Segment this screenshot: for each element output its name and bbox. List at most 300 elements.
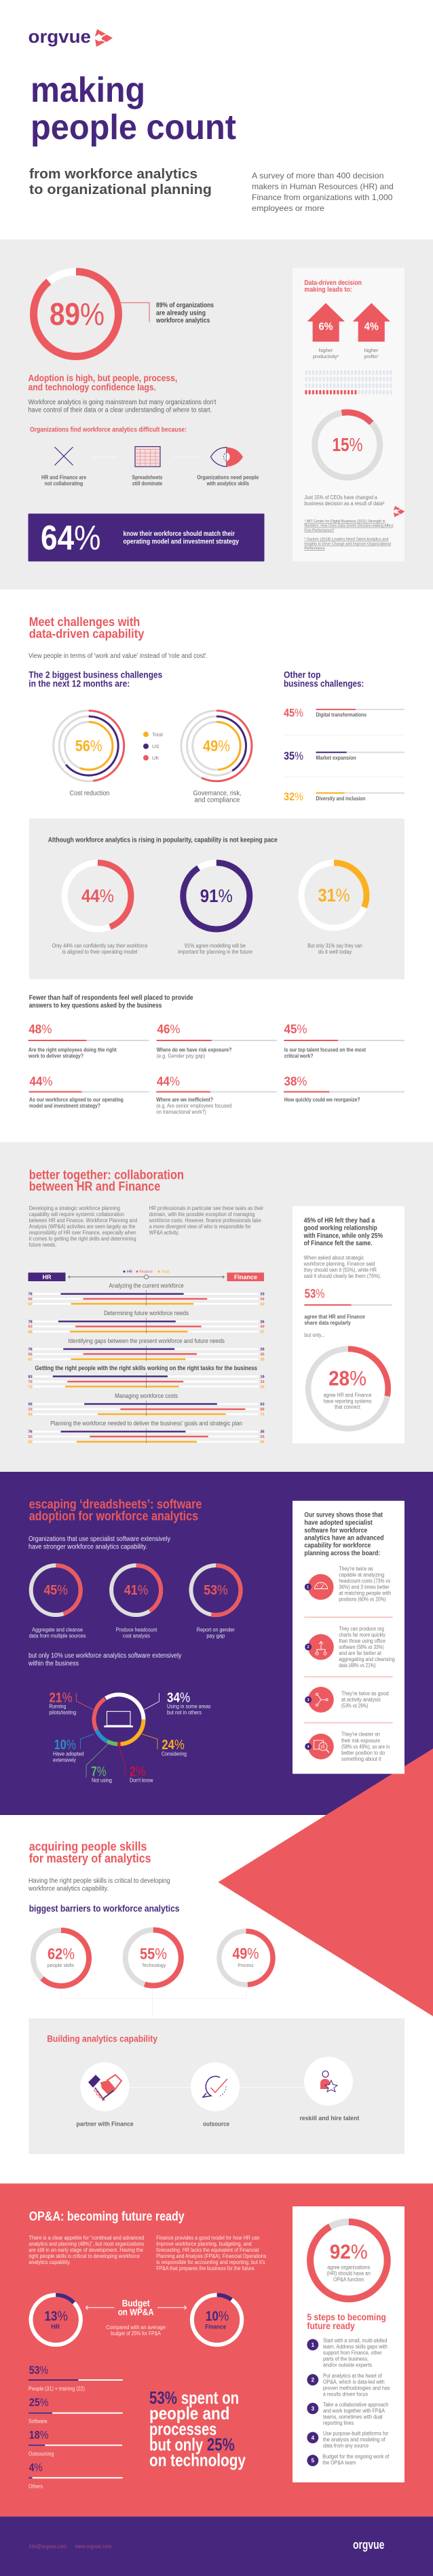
chart row: determining future workforce needs: 26 [261, 1320, 265, 1324]
spending bar: outsourcing: Outsourcing [29, 2451, 54, 2457]
item 4 [305, 1731, 390, 1762]
item 1: They're twice as [339, 1565, 373, 1572]
card heading: planning across the board: [304, 1549, 380, 1557]
body text: right column: domain, with the possible exception of managing [149, 1211, 255, 1217]
stat: 45%: 45% [284, 1021, 307, 1036]
chart row: getting the right people: 72 [29, 1385, 33, 1389]
card heading: 5 steps: future ready [307, 2320, 355, 2331]
icon: gauge [315, 1582, 327, 1588]
heading: key questions: answers to key questions asked by the business [29, 1002, 162, 1009]
stat: 46%: Where do we have risk exposure? [157, 1047, 231, 1053]
donut chart: 31% [301, 863, 366, 928]
item 4: their risk exposure [341, 1738, 380, 1744]
donut chart: 92%: (HR) should have an [327, 2271, 371, 2277]
chart row: planning the workforce: 76 [29, 1430, 33, 1435]
step 2: a results driven focus [323, 2391, 368, 2397]
stat: 48%: work to deliver strategy? [28, 1053, 83, 1059]
triple ring chart: cost reduction [54, 711, 124, 781]
callout: 53% spent on people [149, 2387, 246, 2470]
callout: 64%: 64% [41, 518, 100, 557]
stat: 44% inefficiency: on transactional work?) [156, 1109, 206, 1115]
callout: 53% spent on people: people and [149, 2403, 229, 2423]
step 1: and/or outside experts [323, 2362, 372, 2368]
step 2: 2 [312, 2377, 315, 2383]
chart row: identifying gaps: 76 [29, 1348, 33, 1352]
chart row: planning the workforce: 35 [261, 1430, 265, 1435]
callout: 64%: know their workforce should match their [124, 530, 235, 538]
panel: data-driven decisions [293, 268, 404, 562]
stat: 53%: but only... [304, 1332, 325, 1338]
card heading: Data-driven decision [304, 279, 362, 287]
chart row: managing workforce costs: 23 [29, 1408, 33, 1412]
body text: left column [29, 2235, 144, 2265]
chart row: planning the workforce: 62 [29, 1441, 33, 1445]
survey description: Finance from organizations with 1,000 [252, 193, 393, 202]
stat: 38%: How quickly could we reorganize? [284, 1097, 360, 1103]
chart row: planning the workforce: 45 [261, 1441, 265, 1445]
survey description: A survey of more than 400 decision [252, 171, 384, 180]
callout: 10%: Have adopted [53, 1751, 84, 1757]
callout: 53% spent on people: processes [149, 2419, 216, 2439]
subtitle: to organizational planning [29, 182, 212, 197]
chart row: getting the right people [29, 1365, 265, 1389]
connector line [121, 303, 149, 322]
body text: left column: There is a clear appetite for “continual and advanced [29, 2235, 144, 2241]
step 3: teams, sometimes with dual [323, 2414, 383, 2420]
heading: meet challenges: data-driven capability [29, 627, 144, 641]
heading: OP&A: OP&A: becoming future ready [29, 2209, 185, 2224]
heading: acquiring people skills [29, 1839, 151, 1865]
card heading [304, 1511, 384, 1557]
body text: left column: it comes to getting the right skills and determining [29, 1236, 136, 1242]
footer logo: orgvue [353, 2538, 384, 2552]
footer logo [353, 506, 404, 2552]
footnotes: Performance [304, 547, 325, 551]
background: adoption section [0, 239, 433, 589]
step 3: reporting lines [323, 2420, 354, 2426]
donut chart: Finance 10% [192, 2295, 242, 2345]
callout: 2% [118, 1744, 153, 1783]
donut chart: 28%: 28% [328, 1367, 366, 1390]
callout: 34% [144, 1690, 210, 1716]
heading: acquiring people skills: acquiring people skills [29, 1839, 147, 1854]
body text: left column: analytics capability. [29, 2259, 71, 2265]
chart row: managing workforce costs: 88 [261, 1408, 265, 1412]
heading: adoption: and technology confidence lags. [29, 381, 156, 392]
subtitle: from workforce analytics [29, 167, 197, 182]
card heading: 5 steps [307, 2311, 386, 2331]
HR label box: HR [42, 1274, 52, 1281]
footer contacts: info@orgvue.com [29, 2543, 67, 2550]
label: governance [193, 789, 242, 804]
heading: escaping dreadsheets [29, 1498, 202, 1523]
connector dashes [92, 456, 199, 458]
chart row: determining future workforce needs: 63 [29, 1325, 33, 1329]
text: only 10% [28, 1652, 181, 1667]
legend: Total [152, 731, 163, 738]
caption: aggregate: Aggregate and cleanse [32, 1627, 83, 1633]
budget label and arrows [86, 2299, 186, 2337]
label: higher profits: higher [364, 347, 379, 353]
callout: 53% spent on people: but only 25% [149, 2434, 235, 2455]
background: OP&A section [0, 2183, 433, 2516]
donut chart: 55%: 55% [140, 1945, 167, 1962]
donut chart: 91% [183, 863, 250, 929]
icon: partner with Finance [76, 2063, 134, 2128]
survey description: employees or more [252, 203, 324, 213]
heading: meet challenges [29, 615, 144, 641]
card body: they should own it (55%), while HR [304, 1267, 377, 1273]
body text: right column: FP&A that prepares the business for the future. [156, 2265, 255, 2271]
title [31, 71, 236, 147]
intro text [28, 1877, 170, 1892]
spending bar: people and training: People (31) + training (22) [29, 2386, 85, 2392]
panel heading: Building analytics capability [47, 2034, 157, 2044]
icon: laptop [105, 1711, 132, 1727]
panel heading: Although workforce analytics is rising in popularity, capability is not keeping pace [48, 837, 278, 844]
donut chart: 53% [191, 1565, 240, 1615]
caption: headcount [116, 1627, 157, 1639]
chart row: identifying gaps: 56 [29, 1352, 33, 1357]
stat: 44% inefficiency [156, 1074, 277, 1115]
title: making [31, 71, 145, 110]
legend: Finance [140, 1270, 153, 1274]
stat: 48% [28, 1021, 149, 1059]
chart row: determining future workforce needs: 37 [261, 1330, 265, 1334]
label: higher productivity [313, 347, 339, 359]
donut chart: Finance 10%: Finance [205, 2323, 226, 2330]
double-headed arrow [68, 1275, 224, 1279]
donut chart: HR 13%: 13% [44, 2309, 68, 2324]
chart row: identifying gaps: 45 [261, 1352, 265, 1357]
background: software section [0, 1472, 433, 1815]
callout: 24%: 24% [162, 1738, 185, 1753]
panel: 5 steps card [293, 2206, 404, 2482]
body text: right column [149, 1205, 264, 1236]
caption: 44% [52, 943, 148, 955]
legend: US [152, 743, 159, 749]
chart row: analyzing the current workforce: 67 [29, 1302, 33, 1306]
stat: 38% [284, 1074, 404, 1103]
callout: 21%: Running [49, 1704, 66, 1710]
callout: 24%: Considering [162, 1751, 187, 1757]
card body [303, 1255, 381, 1279]
chart row: identifying gaps [29, 1338, 265, 1362]
chart row: analyzing the current workforce: 76 [29, 1293, 33, 1297]
chart row: determining future workforce needs: 49 [261, 1325, 265, 1329]
step 1: team. Address skills gaps with [323, 2344, 388, 2350]
body text: left column: right people skills is critical to developing workforce [29, 2253, 140, 2259]
panel: meet challenges [28, 615, 404, 1115]
heading: better together: between HR and Finance [29, 1180, 160, 1194]
heading: escaping dreadsheets: escaping ‘dreadsheets’: software [29, 1498, 202, 1512]
item 4: They're clearer on [341, 1731, 380, 1737]
intro text: Having the right people skills is critical to developing [29, 1877, 170, 1885]
budget label and arrows: Compared with an average [106, 2324, 166, 2330]
panel: specialist software card [293, 1501, 404, 1774]
donut chart: 92%: OP&A function [333, 2277, 364, 2283]
chart row: analyzing the current workforce: 54 [261, 1297, 265, 1302]
step 1: support from Finance, other [323, 2350, 382, 2356]
body text: right column: Planning and Analysis (FP&A). Financial Operations [156, 2253, 266, 2259]
body text: left column: capability will require systemic collaboration [29, 1211, 124, 1217]
card body: workforce planning, Finance said [303, 1261, 375, 1267]
heading: better together [29, 1168, 184, 1194]
body text: right column: WP&A activity. [149, 1230, 179, 1236]
callout: 53% spent on people: on technology [149, 2450, 246, 2470]
subheading: 2 biggest challenges [29, 669, 162, 688]
card key statement: 45% of HR felt they had a [304, 1216, 375, 1224]
intro text: have stronger workforce analytics capability. [29, 1543, 147, 1550]
legend [124, 1270, 169, 1274]
legend: HR [127, 1270, 132, 1274]
caption: 31%: But only 31% say they can [307, 943, 362, 949]
text: CEOs: Just 15% of CEOs have changed a [304, 494, 377, 501]
heading: adoption [29, 372, 177, 392]
callout: 64%: operating model and investment strategy [124, 539, 239, 546]
legend [143, 731, 163, 761]
callout: 34%: Using in some areas [167, 1704, 210, 1710]
chart row: getting the right people: Getting the right people with the right skills working on the right tasks for the business [35, 1365, 257, 1371]
item 3 [305, 1687, 389, 1713]
item 3: at activity analysis [341, 1696, 381, 1702]
donut chart: 55%: Technology [142, 1962, 166, 1968]
caption: 31%: do it well today [318, 949, 352, 955]
item 3: 3 [307, 1698, 309, 1702]
label: governance: Governance, risk, [193, 789, 242, 797]
background: collaboration section [0, 1142, 433, 1472]
chart row: analyzing the current workforce: Analyzing the current workforce [109, 1282, 184, 1289]
card heading: analytics have an advanced [304, 1534, 384, 1542]
item 4: 4 [307, 1745, 309, 1749]
body text: left column: Analysis (WP&A) activities are seen largely as the [29, 1224, 135, 1230]
item 4: better position to do [341, 1750, 385, 1756]
decorative coral triangle [218, 1749, 433, 2016]
donut chart: 62% [33, 1930, 89, 1986]
panel: better together [29, 1168, 404, 1445]
callout: 64% [29, 513, 265, 562]
HR label box [29, 1272, 65, 1281]
label: higher productivity: higher [319, 347, 333, 353]
spending bar: others: Others [29, 2483, 43, 2489]
item 2: and are far better at [339, 1650, 382, 1656]
step 5: 5 [312, 2458, 315, 2464]
caption: 91% [178, 943, 252, 955]
stat: diversity and inclusion: 32% [284, 790, 303, 803]
body text: left column: are still in an early stage of development. Having the [29, 2247, 143, 2253]
body text: right column: a more divergent view of who is responsible for [149, 1224, 251, 1230]
item 3: (53% vs 28%) [341, 1702, 369, 1709]
card key statement: of Finance felt the same. [304, 1239, 373, 1247]
donut chart: 45%: 45% [43, 1583, 68, 1598]
chart row: planning the workforce [29, 1420, 265, 1445]
callout text: 89% of organizations [156, 302, 214, 309]
donut chart: 44% [64, 863, 131, 929]
body text: left column: Developing a strategic workforce planning [29, 1205, 120, 1211]
footnotes [304, 520, 394, 551]
footnotes: ¹ MIT Center for Digital Business (2011) Strength in [304, 520, 385, 524]
donut chart: software adoption [85, 1685, 153, 1753]
subtitle [29, 167, 212, 197]
text: CEOs [304, 494, 385, 507]
step 4: the analysis and modeling of [323, 2437, 385, 2443]
Finance label box: Finance [234, 1274, 257, 1281]
icon: arrow 6%: 6% [319, 321, 333, 333]
step 2: Put analytics at the heart of [323, 2373, 382, 2379]
body text: right column: Finance provides a good model for how HR can [156, 2235, 259, 2241]
chart row: getting the right people: 19 [261, 1375, 265, 1379]
caption: 31% [307, 943, 362, 955]
callout text: workforce analytics [155, 317, 210, 325]
caption: 44%: Only 44% can confidently say their workforce [52, 943, 148, 949]
icon: cross [54, 447, 73, 465]
stat: 44% alignment: 44% [30, 1074, 53, 1088]
body text: right column: HR professionals in particular see these tasks as their [149, 1205, 264, 1211]
callout: 7%: Not using [92, 1777, 112, 1783]
icon: arrow 4%: 4% [364, 321, 379, 333]
stat: 44% alignment: model and investment strategy? [29, 1103, 100, 1109]
subheading: 2 biggest challenges: in the next 12 months are: [29, 678, 130, 688]
item 1: capable at analyzing [339, 1572, 384, 1578]
donut chart: 31%: 31% [318, 885, 350, 905]
item 2 [305, 1626, 395, 1668]
footnotes: ² Gartner (2018) Leaders Need Talent Analytics and [304, 538, 388, 542]
legend: UK [152, 755, 159, 761]
stat: 48%: 48% [29, 1021, 52, 1036]
chart row: getting the right people: 70 [29, 1380, 33, 1384]
stat: 46%: (e.g. Gender pay gap) [157, 1053, 206, 1059]
item 1: 36%) and 3 times better [339, 1584, 390, 1590]
donut chart: 62%: people skills [48, 1962, 74, 1968]
donut chart: 91%: 91% [200, 886, 233, 906]
panel: acquiring people skills [28, 1839, 404, 2154]
intro text: workforce analytics capability. [28, 1885, 109, 1892]
intro text: View people in terms of 'work and value' instead of 'role and cost'. [29, 652, 208, 660]
chart row: managing workforce costs: 55 [29, 1403, 33, 1407]
body text: right column: forecasting. HR lacks the equivalent of Financial [156, 2247, 259, 2253]
step 1: parts of the business, [323, 2356, 369, 2362]
chart row: identifying gaps: 67 [29, 1358, 33, 1362]
spending bar: software [29, 2396, 123, 2424]
item 2: software (58% vs 33%) [339, 1644, 384, 1650]
donut chart: 28%: that connect [335, 1404, 361, 1410]
callout: 2%: Don't know [130, 1777, 153, 1783]
donut chart: 41%: 41% [124, 1583, 149, 1598]
donut chart: 49% [219, 1931, 273, 1985]
label: cost reduction: Cost reduction [69, 790, 110, 798]
budget label and arrows: on WP&A [118, 2307, 154, 2317]
stat: market expansion: 35% [284, 749, 303, 762]
stat: 45% [284, 1021, 404, 1059]
item 1: 1 [307, 1586, 309, 1590]
card body: When asked about strategic [304, 1255, 364, 1261]
card heading: capability for workforce [304, 1542, 371, 1550]
heading: key questions: Fewer than half of respondents feel well placed to provide [29, 994, 193, 1002]
panel: escaping dreadsheets [28, 1498, 404, 1783]
donut chart: 49%: Process [238, 1962, 254, 1968]
chart row: managing workforce costs: 43 [29, 1413, 33, 1417]
step 3: and work together with FP&A [323, 2408, 385, 2414]
label: analytics skills: with analytics skills [206, 480, 249, 487]
label: higher profits: profits¹ [364, 353, 379, 359]
chart row: identifying gaps: 35 [261, 1358, 265, 1362]
donut chart: HR 13%: HR [51, 2323, 60, 2330]
item 3: They're twice as good [341, 1690, 389, 1696]
label: spreadsheets: still dominate [132, 480, 162, 487]
donut chart: 92%: 92% [330, 2241, 368, 2263]
body text: left column: responsibility of HR over Finance, especially when [29, 1230, 136, 1236]
card heading: software for workforce [304, 1526, 367, 1534]
subheading: 2 biggest challenges: The 2 biggest business challenges [29, 669, 162, 680]
card heading: making leads to: [304, 286, 352, 294]
stat: digital transformations [284, 707, 404, 720]
card heading: Our survey shows those that [304, 1511, 383, 1519]
item 1 [305, 1565, 391, 1602]
stat: 46%: 46% [157, 1021, 181, 1036]
subheading: barriers: biggest barriers to workforce analytics [29, 1903, 180, 1914]
chart row: determining future workforce needs: 68 [29, 1330, 33, 1334]
spending bar: software: 25% [29, 2396, 49, 2409]
legend: Total [162, 1270, 169, 1274]
donut chart: 28%: have reporting systems [323, 1398, 372, 1404]
stat: digital transformations: 45% [284, 707, 303, 720]
body text: have control of their data or a clear understanding of where to start. [29, 406, 212, 414]
pictogram: 15 of 100 people [304, 370, 393, 395]
label: analytics skills: Organizations need people [197, 474, 259, 481]
chart row: managing workforce costs: 63 [261, 1403, 265, 1407]
card key statement: good working relationship [304, 1224, 377, 1232]
item 2: than those using office [339, 1638, 385, 1644]
caption: gender pay: pay gap [206, 1633, 225, 1639]
caption: aggregate [29, 1627, 86, 1639]
stat: 44% inefficiency: (e.g. Are senior employees focused [156, 1103, 231, 1109]
donut chart: Finance 10%: 10% [206, 2309, 229, 2324]
body text [29, 399, 216, 414]
footer contacts: www.orgvue.com [75, 2543, 112, 2550]
body text: right column [156, 2235, 266, 2271]
donut chart: 92% [310, 2222, 388, 2299]
step 2: OP&A, which is data-led with [323, 2379, 385, 2385]
chart row: planning the workforce: 50 [29, 1435, 33, 1439]
stat: 53%: share data regularly [304, 1320, 351, 1326]
stat: diversity and inclusion: Diversity and inclusion [316, 796, 365, 802]
subheading: other challenges [284, 669, 364, 688]
intro text [29, 1536, 170, 1550]
step 3: 3 [312, 2406, 315, 2412]
stat: 44% inefficiency: Where are we inefficient? [156, 1097, 213, 1103]
budget label and arrows: Budget [122, 2299, 150, 2309]
label: spreadsheets [132, 474, 163, 487]
panel: OP&A becoming future ready [29, 2206, 404, 2489]
chart row: determining future workforce needs: Determining future workforce needs [104, 1310, 189, 1316]
callout: 10%: extensively [53, 1757, 76, 1763]
donut chart: 92%: agree organizations [327, 2265, 370, 2271]
caption: 44%: is aligned to their operating model [62, 949, 138, 955]
step 4: 4 [312, 2435, 315, 2441]
triple ring chart: cost reduction: 56% [75, 737, 102, 755]
item 1: headcount costs (73% vs [339, 1578, 390, 1584]
callout: 21%: 21% [49, 1690, 73, 1705]
icon: spreadsheet [135, 446, 160, 467]
heading: meet challenges: Meet challenges with [29, 615, 140, 629]
donut chart: 89%: 89% [50, 296, 105, 332]
title: people count [31, 108, 236, 147]
spending bar: people and training: 53% [29, 2364, 48, 2377]
icon: partner with Finance: partner with Finance [76, 2120, 134, 2128]
donut chart: 45% [31, 1565, 81, 1615]
step 3: Take a collaborative approach [323, 2402, 388, 2408]
footnotes: Numbers: How Does Data-Driven Decision-making Affect [304, 524, 394, 528]
